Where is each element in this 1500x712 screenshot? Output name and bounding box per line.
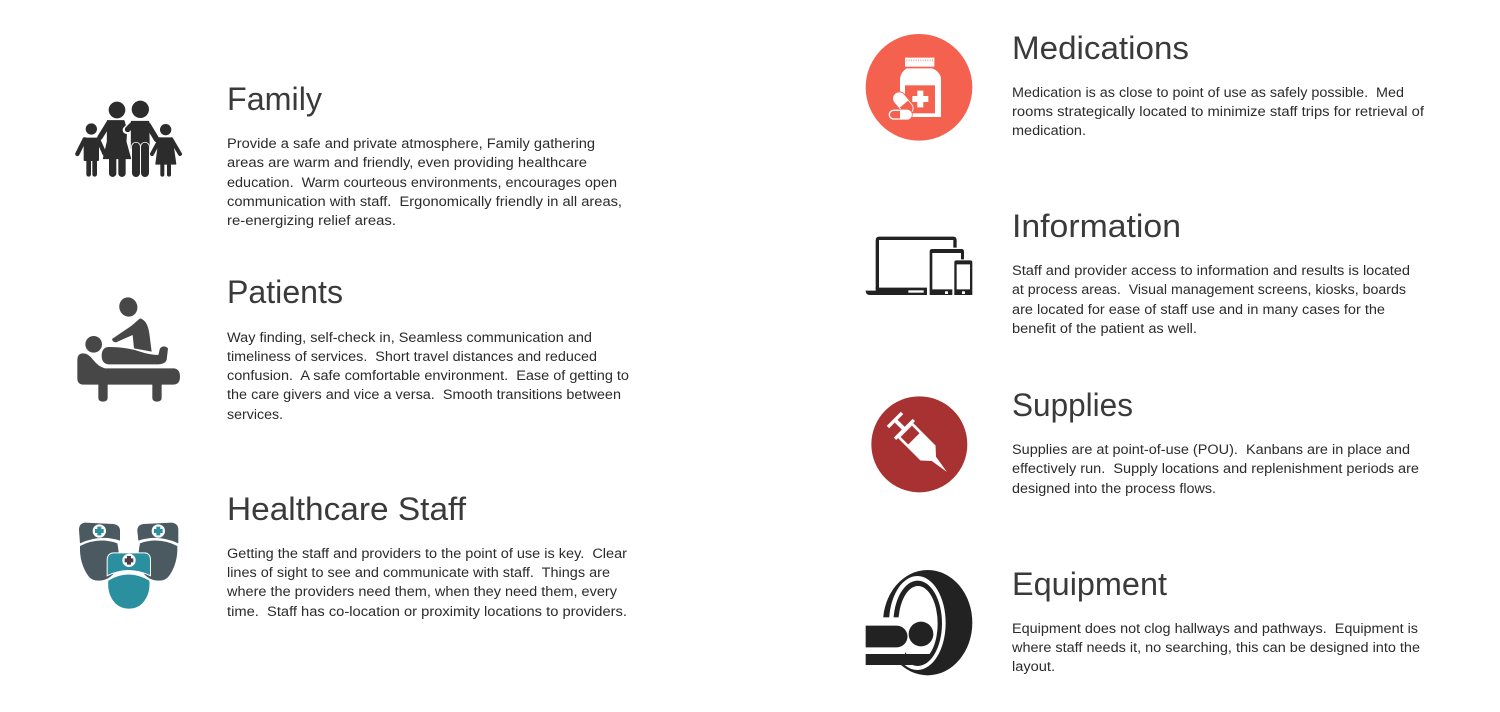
heading: family: Family [227,81,322,117]
heading: patients: Patients [227,274,343,310]
girl [152,138,180,175]
text block: family: areas are warm and friendly, even providing healthcare [227,155,587,170]
text block: equipment [1011,621,1420,674]
text block: medications: rooms strategically located to minimize staff trips for retrieval of [1012,104,1424,119]
heading: medications: Medications [1012,30,1189,66]
left nurse [79,523,120,581]
boy [77,139,105,174]
icon: patient and therapist [77,295,180,402]
icon: syringe [871,396,967,492]
text block: information [1012,263,1410,336]
icon: healthcare staff [79,523,178,609]
icon: devices [866,238,972,295]
icon: family [77,101,180,175]
text block: medications [1012,85,1424,138]
text block: patients: services. [227,407,283,422]
text block: healthcare staff: time. Staff has co-location or proximity locations to providers. [227,604,627,619]
text block: healthcare staff [226,546,628,619]
text block: supplies: effectively run. Supply locations and replenishment periods are [1012,461,1419,476]
text block: information: are located for ease of staff use and in many cases for the [1012,302,1385,317]
icon: MRI scanner [866,570,972,675]
text block: healthcare staff: Getting the staff and providers to the point of use is key. Clear [227,546,628,561]
text block: information: Staff and provider access to information and results is located [1012,263,1410,278]
text block: patients: Way finding, self-check in, Seamless communication and [227,330,592,345]
heading: equipment: Equipment [1012,566,1167,602]
text block: patients: the care givers and vice a versa. Smooth transitions between [227,387,621,402]
father [127,121,157,173]
heading: supplies: Supplies [1012,387,1133,423]
text block: family: re-energizing relief areas. [227,213,396,228]
mother [100,121,131,173]
heading: information: Information [1012,208,1181,244]
text block: equipment: where staff needs it, no searching, this can be designed into the [1011,640,1420,655]
text block: family [227,136,622,228]
text block: patients: timeliness of services. Short travel distances and reduced [227,349,597,364]
text block: information: benefit of the patient as well. [1012,321,1197,336]
front nurse [108,553,150,609]
text block: family: communication with staff. Ergonomically friendly in all areas, [227,194,622,209]
text block: supplies: designed into the process flows. [1012,481,1216,496]
text block: healthcare staff: lines of sight to see and communicate with staff. Things are [227,565,610,580]
text block: equipment: Equipment does not clog hallways and pathways. Equipment is [1012,621,1418,636]
text block: information: at process areas. Visual management screens, kiosks, boards [1012,282,1406,297]
text block: supplies [1012,442,1419,496]
text block: family: education. Warm courteous environments, encourages open [227,175,617,190]
text block: equipment: layout. [1012,659,1055,674]
text block: patients [227,330,629,422]
right nurse [137,523,178,581]
text block: medications: Medication is as close to point of use as safely possible. Med [1012,85,1404,100]
text block: medications: medication. [1012,123,1086,138]
text block: healthcare staff: where the providers need them, when they need them, every [226,584,617,599]
text block: patients: confusion. A safe comfortable environment. Ease of getting to [227,368,629,383]
heading: healthcare staff: Healthcare Staff [227,491,466,527]
text block: family: Provide a safe and private atmosphere, Family gathering [227,136,595,151]
text block: supplies: Supplies are at point-of-use (POU). Kanbans are in place and [1012,442,1410,457]
icon: medications [866,34,972,141]
